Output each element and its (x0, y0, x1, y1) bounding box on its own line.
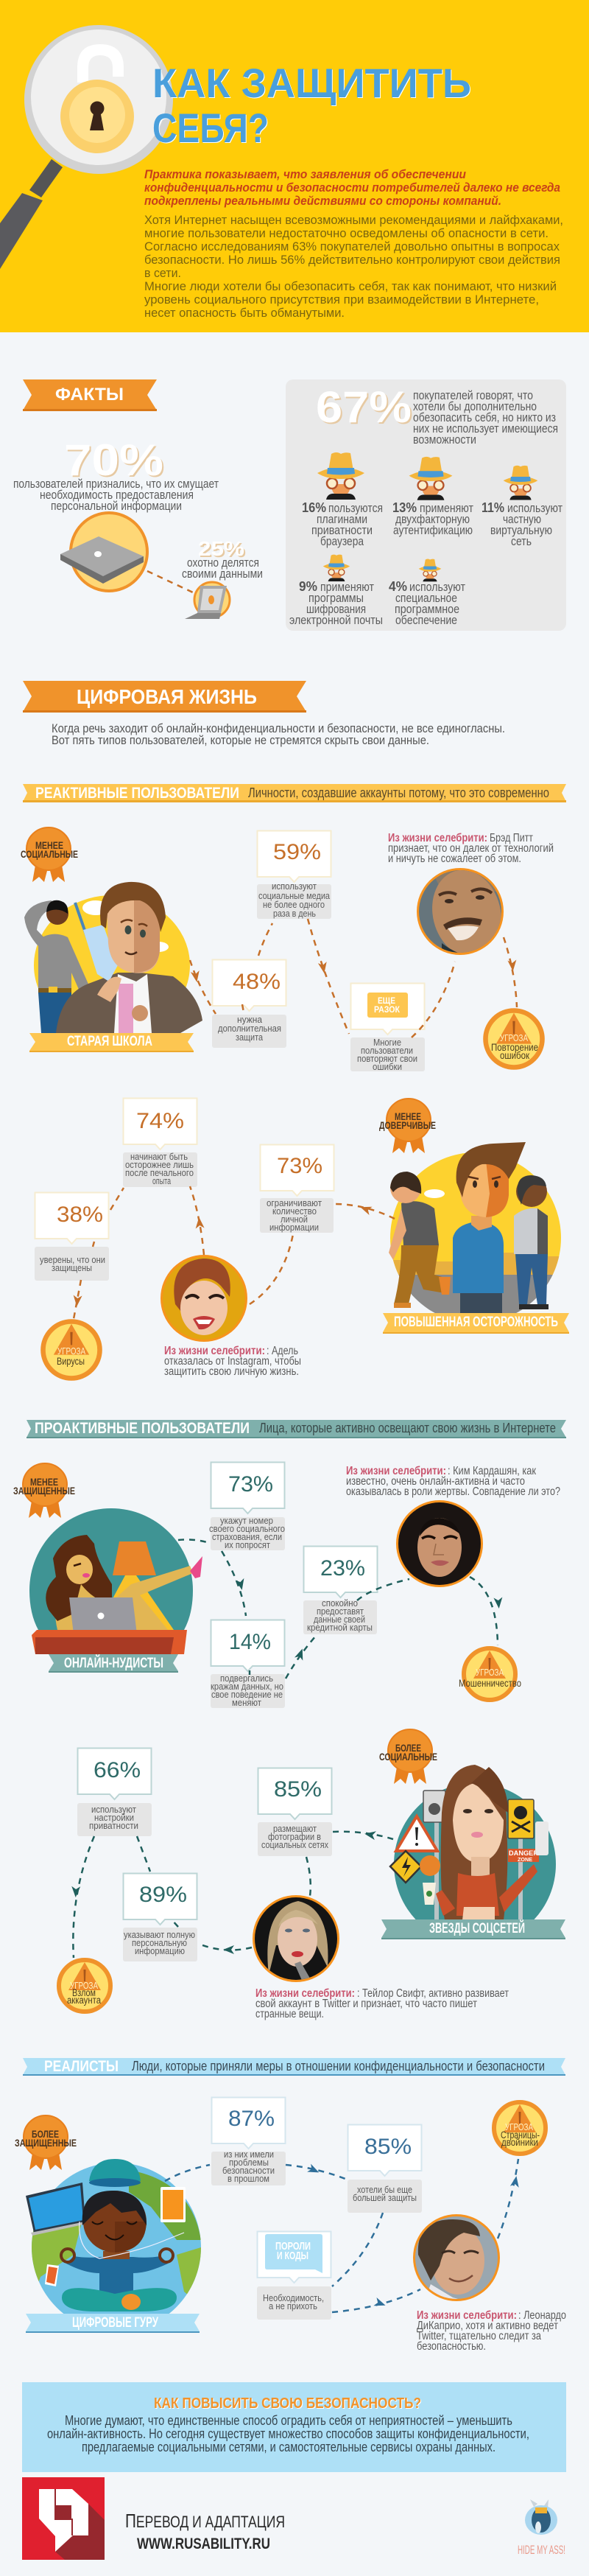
portrait: Leonardo DiCaprio (413, 2214, 501, 2303)
text: 9 percent: применяют (320, 581, 374, 594)
callout: 87 percent: безопасности (222, 2165, 275, 2176)
text: Kim Kardashian quote (346, 1465, 560, 1498)
callout: 14 percent: подвергались (220, 1673, 273, 1684)
arrows: proactive flow top (178, 1539, 504, 1679)
figure: left walking man (389, 1172, 451, 1308)
callout: 85 percent want protection: 85% (364, 2135, 412, 2159)
callout: 89 percent: указывают полную (124, 1929, 195, 1940)
intro body text: Многие люди хотели бы обезопасить себя, так как понимают, что низкий (144, 279, 557, 293)
callout: 87 percent: в прошлом (228, 2173, 269, 2184)
icon: laptop (26, 2183, 87, 2236)
callout: passwords and codes: И КОДЫ (277, 2250, 308, 2262)
badge: less social (21, 827, 78, 882)
text: 16 percent (302, 500, 383, 548)
heading: proactive users ribbon (27, 1420, 566, 1438)
threat: repeat mistakes: ошибок (500, 1050, 529, 1061)
callout: repeat mistakes (350, 983, 425, 1072)
stat: 70 percent: необходимость предоставления (40, 489, 194, 502)
threat: account hacking (59, 1960, 110, 2012)
title (152, 60, 471, 151)
intro body text: в сети. (144, 266, 181, 280)
badge: less protected (13, 1463, 75, 1518)
callout: 66 percent: настройки (94, 1812, 134, 1823)
icon: spy hat 9 (323, 555, 350, 581)
arrows: realists flow (165, 2159, 521, 2312)
text: 16 percent: плагинами (317, 513, 367, 526)
callout: 14 percent (211, 1620, 285, 1708)
callout: passwords and codes: Необходимость, (263, 2292, 324, 2303)
threat: doppelganger pages (494, 2102, 546, 2154)
text: 11 percent: сеть (511, 535, 532, 548)
label: stars ribbon: ЗВЕЗДЫ СОЦСЕТЕЙ (429, 1920, 525, 1936)
threat: repeat mistakes (486, 1011, 542, 1067)
callout: repeat mistakes: РАЗОК (374, 1004, 401, 1015)
label: gurus ribbon: ЦИФРОВЫЕ ГУРУ (72, 2315, 158, 2331)
text: Taylor Swift quote: свой аккаунт в Twitter и признает, что часто пишет (255, 1998, 477, 2010)
text: 16 percent: браузера (320, 535, 364, 548)
icon: open laptop with lock (185, 582, 230, 619)
stat: 67 percent: возможности (413, 433, 476, 447)
callout: 85 percent want protection: хотели бы еще (357, 2184, 412, 2195)
heading: realists ribbon (23, 2058, 565, 2076)
text: Brad Pitt quote: признает, что он далек от технологий (388, 842, 554, 855)
text: 16 percent: 16% (302, 500, 326, 515)
callout: 89 percent: 89% (139, 1883, 187, 1907)
callout: 73 percent limit info: количество (272, 1205, 317, 1217)
figure: woman with hair (436, 1765, 537, 1920)
intro lead text: конфиденциальности и безопасности потребителей далеко не всегда (144, 181, 560, 195)
callout: 38 percent: уверены, что они (40, 1254, 105, 1265)
callout: 66 percent (77, 1748, 152, 1836)
text: Brad Pitt quote: Брэд Питт (490, 832, 533, 844)
threat: fraud (459, 1648, 521, 1700)
text: 11 percent: виртуальную (490, 524, 552, 537)
icon: cap (89, 2159, 141, 2187)
threat: account hacking: УГРОЗА (70, 1980, 98, 1991)
text: how to improve body (47, 2413, 529, 2454)
heading: proactive users ribbon: ПРОАКТИВНЫЕ ПОЛЬЗОВАТЕЛИ (35, 1420, 250, 1437)
heading: facts ribbon (23, 379, 157, 411)
text: 4 percent: обеспечение (395, 614, 457, 627)
text: 4 percent: 4% (389, 579, 407, 594)
callout: 38 percent: защищены (52, 1262, 92, 1273)
stat: 67 percent: хотели бы дополнительно (413, 400, 537, 413)
badge: less protected: ЗАЩИЩЕННЫЕ (13, 1485, 75, 1497)
badge: more social (379, 1729, 437, 1784)
threat: viruses: Вирусы (57, 1356, 85, 1367)
label: online nudists ribbon (49, 1654, 178, 1673)
callout: 74 percent: 74% (136, 1109, 184, 1133)
callout: 73 percent limit info: 73% (277, 1154, 322, 1178)
text: 9 percent: шифрования (306, 603, 366, 616)
callout: 74 percent (123, 1098, 197, 1187)
callout: passwords and codes: ПОРОЛИ (275, 2240, 311, 2253)
callout: 87 percent (211, 2097, 286, 2185)
intro lead text: подкреплены реальными действиями со стороны компаний. (144, 194, 501, 208)
callout: 14 percent: кражам данных, но (211, 1681, 283, 1692)
intro body text: несет опасность быть обманутыми. (144, 306, 345, 320)
callout: 48 percent: защита (236, 1032, 264, 1043)
icon: spy hat 11 (504, 466, 537, 500)
threat: viruses (43, 1322, 100, 1378)
text: 13 percent (392, 500, 473, 537)
stat: 67 percent: них не использует имеющиеся (413, 422, 558, 435)
sign: danger zone: DANGER (509, 1849, 538, 1857)
callout: 85 percent photos (258, 1768, 332, 1856)
callout: 73 percent social number: укажут номер (220, 1515, 273, 1526)
badge: less trusting (379, 1099, 436, 1153)
stat: 67 percent (316, 382, 558, 447)
text: Kim Kardashian quote: Из жизни селебрити: (346, 1465, 446, 1477)
portrait: Taylor Swift (253, 1895, 341, 1984)
heading: facts ribbon: ФАКТЫ (55, 385, 124, 405)
stat: 25 percent: 25% (198, 537, 244, 560)
callout: 23 percent: данные своей (314, 1614, 365, 1625)
intro lead text: Практика показывает, что заявления об обеспечении (144, 167, 467, 181)
callout: 59 percent: используют (272, 881, 317, 892)
callout: 85 percent photos: размещают (273, 1823, 317, 1834)
text: Adele quote: : Адель (267, 1345, 298, 1357)
callout: repeat mistakes: пользователи (361, 1045, 413, 1056)
header panel (0, 0, 589, 332)
stat: 67 percent: обезопасить себя, но никто из (413, 411, 556, 424)
stat: 70 percent: персональной информации (51, 500, 182, 513)
heading: digital life ribbon: ЦИФРОВАЯ ЖИЗНЬ (77, 685, 257, 708)
title: СЕБЯ? (152, 105, 269, 151)
callout: 59 percent: не более одного (263, 899, 325, 910)
text: digital life intro (52, 721, 505, 747)
icon: phone and coffee (423, 1821, 549, 1905)
icon: phone (45, 2264, 59, 2286)
threat: fraud: УГРОЗА (476, 1667, 504, 1678)
callout: repeat mistakes: ЕЩЕ (378, 995, 395, 1006)
text: Adele quote: Из жизни селебрити: (164, 1345, 265, 1357)
stat: 25 percent: охотно делятся (187, 556, 259, 570)
text: translation credit: WWW.RUSABILITY.RU (137, 2535, 270, 2552)
stat: 67 percent: 67% (316, 382, 412, 432)
callout: 73 percent limit info: личной (281, 1214, 308, 1225)
text: how to improve body: предлагаемые социальными сетями, и самостоятельные сервисы охраны данных. (82, 2440, 495, 2454)
callout: 23 percent: предоставят (317, 1606, 364, 1617)
portrait: Brad Pitt (417, 868, 504, 955)
badge: less social: СОЦИАЛЬНЫЕ (21, 848, 78, 860)
portrait: Adele (161, 1255, 249, 1345)
text: Taylor Swift quote: странные вещи. (255, 2008, 324, 2020)
heading: reactive users ribbon: РЕАКТИВНЫЕ ПОЛЬЗОВАТЕЛИ (35, 785, 239, 802)
callout: 59 percent: социальные медиа (258, 890, 331, 901)
arrows: reactive flow top (190, 919, 518, 1037)
callout: 23 percent: спокойно (322, 1597, 358, 1609)
callout: 59 percent: 59% (273, 840, 321, 864)
threat: doppelganger pages: Страницы- (501, 2129, 540, 2141)
callout: 74 percent: после печального (125, 1167, 194, 1178)
callout: passwords and codes: а не прихоть (269, 2300, 317, 2311)
callout: 48 percent: нужна (237, 1014, 263, 1025)
text: 9 percent: электронной почты (289, 614, 383, 627)
arrow: dashed connector to small laptop (147, 571, 193, 592)
panel: how to improve security (22, 2382, 566, 2472)
text: DiCaprio quote (417, 2309, 566, 2353)
callout: 23 percent: 23% (320, 1556, 365, 1581)
text: digital life intro: Вот пять типов пользователей, которые не стремятся скрыть свои данные. (52, 733, 429, 747)
text: digital life intro: Когда речь заходит об онлайн-конфиденциальности и безопасности, не все единогласны. (52, 721, 505, 735)
badge: more protected (15, 2115, 77, 2170)
text: 4 percent: специальное (395, 592, 457, 605)
threat: fraud: Мошенничество (459, 1678, 521, 1689)
illustration: online nudists (29, 1508, 202, 1673)
panel: tools used (286, 379, 566, 631)
label: online nudists ribbon: ОНЛАЙН-НУДИСТЫ (64, 1655, 163, 1671)
threat: viruses: УГРОЗА (57, 1345, 85, 1357)
callout: 14 percent: меняют (232, 1697, 261, 1708)
callout: 14 percent: свое поведение не (211, 1689, 283, 1700)
text: 13 percent: аутентификацию (393, 524, 473, 537)
stat: 70 percent: пользователей признались, что их смущает (13, 477, 219, 491)
text: Brad Pitt quote: Из жизни селебрити: (388, 832, 487, 844)
intro body text (144, 213, 563, 320)
callout: 59 percent (257, 831, 331, 919)
callout: 74 percent: осторожнее лишь (125, 1159, 194, 1170)
text: Brad Pitt quote: и ничуть не сожалеет об этом. (388, 853, 521, 865)
text: translation credit: ПЕРЕВОД И АДАПТАЦИЯ (125, 2510, 285, 2532)
callout: 38 percent: 38% (57, 1203, 103, 1227)
heading: digital life ribbon (23, 681, 306, 713)
text: Adele quote: отказалась от Instagram, чтобы (164, 1355, 301, 1368)
callout: 85 percent photos: социальных сетях (261, 1839, 328, 1850)
callout: 73 percent social number (209, 1462, 285, 1550)
callout: 38 percent (35, 1192, 109, 1281)
text: 4 percent (389, 579, 465, 627)
text: Adele quote (164, 1345, 301, 1378)
text: translation credit (125, 2510, 285, 2552)
heading: realists ribbon: РЕАЛИСТЫ (44, 2058, 119, 2075)
figure: central man (453, 1142, 526, 1314)
callout: passwords and codes (257, 2231, 331, 2320)
callout: repeat mistakes: повторяют свои (357, 1053, 417, 1064)
text: 9 percent: программы (308, 592, 364, 605)
portrait: Kim Kardashian (396, 1500, 484, 1589)
callout: 85 percent photos: фотографии в (268, 1831, 321, 1842)
illustration: digital gurus (26, 2159, 206, 2333)
logo: hide my ass (518, 2499, 565, 2557)
sign: danger zone: ZONE (518, 1858, 532, 1863)
stat: 25 percent: своими данными (182, 567, 263, 581)
text: DiCaprio quote: : Леонардо (518, 2309, 566, 2322)
callout: 73 percent limit info: информации (269, 1222, 319, 1233)
stat: 67 percent: покупателей говорят, что (413, 389, 533, 402)
text: 11 percent (482, 500, 562, 548)
text: DiCaprio quote: Twitter, тщательно следит за (417, 2330, 541, 2342)
text: Brad Pitt quote (388, 832, 554, 865)
badge: less social: МЕНЕЕ (35, 839, 63, 851)
badge: more protected: БОЛЕЕ (32, 2128, 59, 2140)
callout: 59 percent: раза в день (273, 908, 316, 919)
intro body text: Хотя Интернет насыщен всевозможными рекомендациями и лайфхаками, (144, 213, 563, 227)
intro body text: уровень социального присутствия при взаимодействии в Интернете, (144, 293, 539, 307)
label: old school ribbon (29, 1033, 194, 1052)
callout: repeat mistakes: ошибки (373, 1061, 402, 1072)
callout: 23 percent (303, 1546, 377, 1634)
sign: warning triangle (396, 1816, 437, 1851)
label: increased caution ribbon (383, 1313, 569, 1334)
badge: more protected: ЗАЩИЩЕННЫЕ (15, 2137, 77, 2149)
callout: 66 percent: используют (91, 1804, 136, 1815)
sign: skull (508, 1799, 534, 1838)
text: 11 percent: частную (503, 513, 541, 526)
callout: 89 percent: персональную (132, 1937, 187, 1948)
intro body text: безопасности. Но лишь 56% действительно контролируют свои действия (144, 253, 560, 267)
logo: rusability (22, 2477, 105, 2560)
text: 4 percent: программное (395, 603, 459, 616)
intro body text: многие пользователи недостаточно осведомлены об опасности в сети. (144, 226, 549, 240)
callout: 23 percent: кредитной карты (307, 1622, 373, 1633)
threat: doppelganger pages: двойники (501, 2137, 538, 2148)
illustration: old school (24, 882, 202, 1052)
text: DiCaprio quote: безопасностью. (417, 2340, 486, 2353)
callout: 66 percent: 66% (94, 1758, 141, 1782)
illustration: social media stars (381, 1765, 565, 1945)
figure: right man (514, 1175, 549, 1309)
text: Taylor Swift quote: Из жизни селебрити: (255, 1987, 355, 2000)
callout: 89 percent: информацию (135, 1945, 185, 1956)
callout: 73 percent social number: своего социального (209, 1523, 285, 1534)
text: Taylor Swift quote (255, 1987, 509, 2020)
callout: 48 percent: 48% (233, 970, 281, 994)
intro body text: Согласно исследованиям 63% покупателей довольно опытны в вопросах (144, 239, 560, 253)
threat: account hacking: аккаунта (67, 1995, 101, 2006)
threat: doppelganger pages: УГРОЗА (505, 2121, 533, 2132)
callout: 85 percent want protection: большей защиты (353, 2192, 417, 2203)
callout: 66 percent: приватности (89, 1820, 138, 1831)
text: 13 percent: двухфакторную (395, 513, 470, 526)
callout: 73 percent social number: страхования, если (212, 1531, 282, 1542)
icon: spy hat 13 (409, 457, 452, 500)
text: Adele quote: защитить свою личную жизнь. (164, 1365, 299, 1378)
heading: how to improve: КАК ПОВЫСИТЬ СВОЮ БЕЗОПАСНОСТЬ? (154, 2395, 421, 2412)
badge: less protected: МЕНЕЕ (30, 1476, 58, 1488)
figure: meditating man (61, 2191, 184, 2311)
icon: closed laptop in circle (60, 513, 147, 591)
text: Taylor Swift quote: : Тейлор Свифт, активно развивает (357, 1987, 509, 2000)
callout: 74 percent: опыта (152, 1175, 172, 1186)
callout: 89 percent (123, 1873, 197, 1961)
text: 13 percent: применяют (420, 502, 473, 515)
icon: tablet (161, 2187, 186, 2222)
text: Kim Kardashian quote: : Ким Кардашян, как (448, 1465, 536, 1477)
stat: 70 percent (13, 435, 219, 513)
callout: 74 percent: начинают быть (130, 1151, 188, 1162)
callout: 87 percent: 87% (228, 2107, 275, 2131)
text: 16 percent: приватности (311, 524, 373, 537)
text: 11 percent: 11% (482, 500, 504, 515)
badge: more social: СОЦИАЛЬНЫЕ (379, 1751, 437, 1763)
callout: 48 percent (212, 959, 286, 1048)
threat: repeat mistakes: УГРОЗА (500, 1032, 528, 1043)
label: old school ribbon: СТАРАЯ ШКОЛА (67, 1034, 152, 1049)
callout: 85 percent photos: 85% (274, 1777, 322, 1802)
illustration: increased caution (383, 1142, 569, 1334)
sign: lightning and fire (390, 1851, 440, 1883)
badge: less trusting: МЕНЕЕ (395, 1110, 421, 1122)
callout: 73 percent limit info (260, 1145, 334, 1233)
text: DiCaprio quote: ДиКаприо, хотя и активно ведет (417, 2320, 558, 2332)
callout: 48 percent: дополнительная (218, 1023, 281, 1034)
heading: reactive users ribbon (23, 784, 566, 802)
stat: 25 percent (182, 537, 263, 581)
text: Kim Kardashian quote: известно, очень онлайн-активна и часто (346, 1475, 525, 1488)
text: 4 percent: используют (409, 581, 465, 594)
title: КАК ЗАЩИТИТЬ (152, 60, 471, 106)
arrows: proactive flow bottom (71, 1830, 393, 1958)
callout: 73 percent limit info: ограничивают (267, 1197, 322, 1208)
intro lead text (144, 167, 560, 208)
threat: account hacking: Взлом (72, 1987, 96, 1998)
callout: 87 percent: проблемы (229, 2157, 269, 2168)
callout: 73 percent social number: их попросят (225, 1539, 270, 1550)
text: DiCaprio quote: Из жизни селебрити: (417, 2309, 517, 2322)
text: 16 percent: пользуются (328, 502, 383, 515)
arrows: reactive flow bottom (72, 1186, 395, 1319)
badge: more social: БОЛЕЕ (395, 1742, 421, 1754)
icon: spy hat 4 (419, 559, 441, 581)
sign: danger zone (508, 1849, 539, 1863)
callout: 87 percent: из них имели (224, 2149, 274, 2160)
text: 9 percent (289, 579, 383, 627)
text: 11 percent: используют (507, 502, 562, 515)
callout: 73 percent social number: 73% (228, 1472, 273, 1497)
callout: 85 percent want protection (348, 2125, 422, 2213)
sign: radiation (423, 1791, 445, 1822)
text: 9 percent: 9% (299, 579, 317, 594)
threat: repeat mistakes: Повторение (491, 1042, 538, 1053)
callout: repeat mistakes: Многие (373, 1037, 401, 1048)
text: 13 percent: 13% (392, 500, 417, 515)
label: stars ribbon (381, 1919, 565, 1939)
stat: 70 percent: 70% (64, 435, 163, 485)
icon: spy hat 16 (317, 452, 364, 500)
icon: magnifying glass with padlock (0, 25, 173, 269)
badge: less trusting: ДОВЕРЧИВЫЕ (379, 1119, 436, 1131)
callout: 14 percent: 14% (229, 1630, 271, 1654)
label: gurus ribbon (26, 2314, 200, 2333)
